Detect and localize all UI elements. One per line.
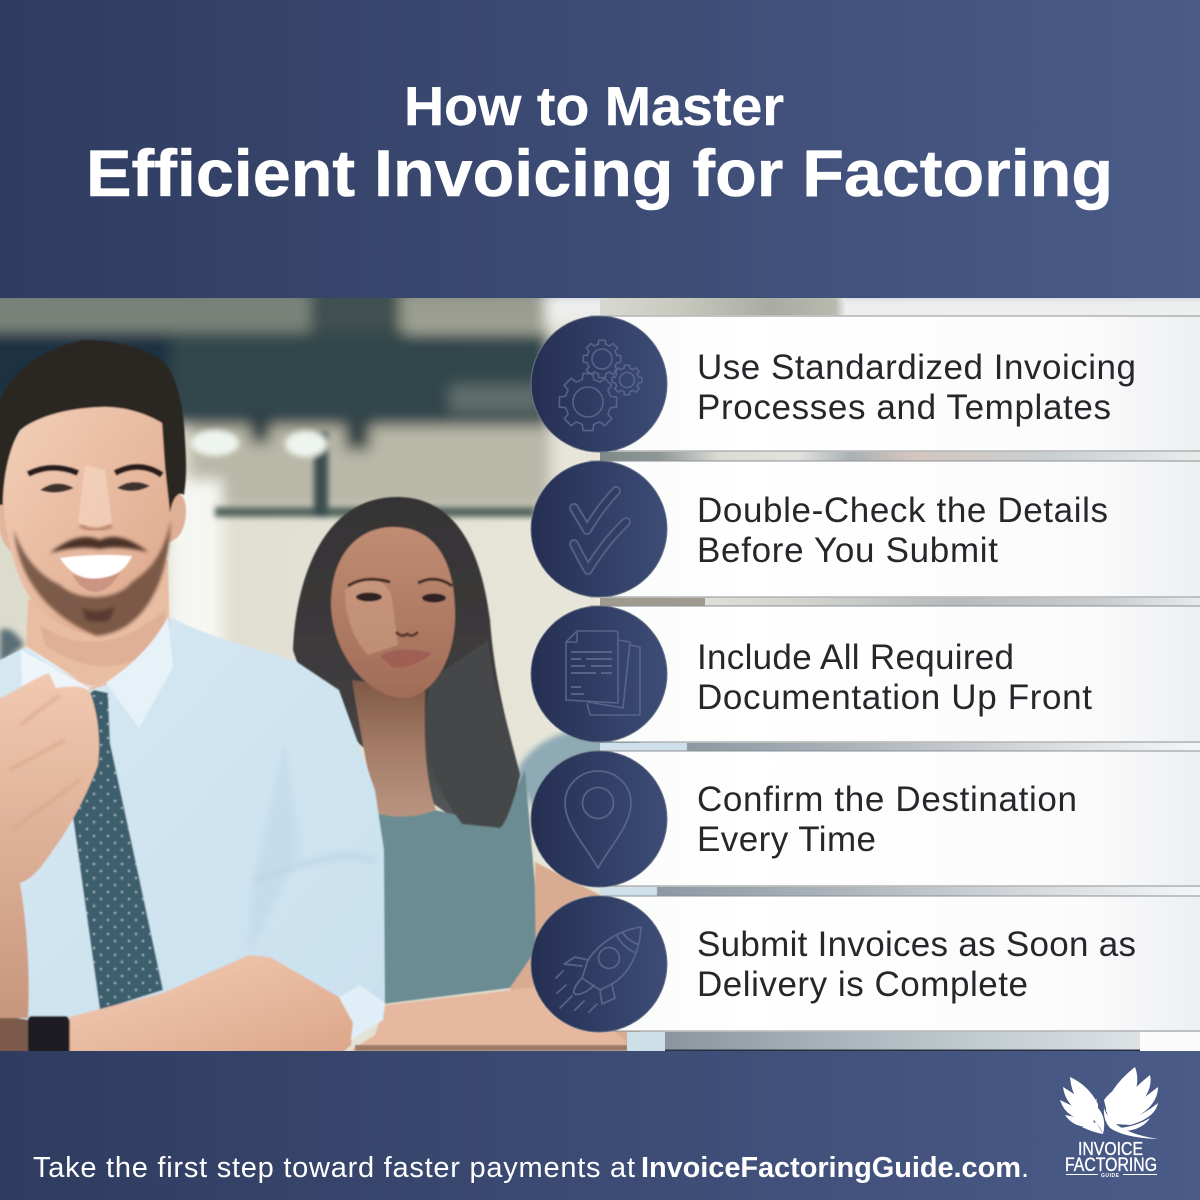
panel 2 text: Before You Submit xyxy=(697,531,998,570)
icon circle: gears xyxy=(531,316,667,452)
icon circle: location pin xyxy=(531,751,667,887)
panel 1 text: Use Standardized Invoicing xyxy=(697,348,1136,387)
photo: two smiling business people in an office xyxy=(0,290,1200,1070)
logo: Invoice Factoring Guide eagle: GUIDE xyxy=(1101,1173,1120,1179)
right arm xyxy=(510,862,640,1051)
panel 3 text: Include All Required xyxy=(697,638,1014,677)
list panel 2 xyxy=(590,461,1200,597)
forearm xyxy=(69,955,353,1055)
brows and eyes xyxy=(28,468,78,474)
icon circle: documents xyxy=(531,606,667,742)
panel 2 text: Double-Check the Details xyxy=(697,491,1108,530)
neck and chest xyxy=(352,680,436,816)
panel 3 text: Documentation Up Front xyxy=(697,678,1092,717)
ears xyxy=(168,493,187,543)
neck xyxy=(26,560,170,690)
header band xyxy=(0,0,1200,298)
footer call to action: InvoiceFactoringGuide.com xyxy=(641,1152,1021,1184)
eagle mark xyxy=(1060,1067,1158,1139)
logo: Invoice Factoring Guide eagle: FACTORING xyxy=(1065,1155,1157,1176)
woman xyxy=(293,497,640,1051)
beard xyxy=(14,520,171,636)
footer call to action: Take the first step toward faster payments at xyxy=(33,1152,635,1184)
footer call to action: . xyxy=(1021,1152,1029,1184)
cuff xyxy=(339,985,385,1040)
brows and eyes xyxy=(348,579,390,586)
hair lock over neck xyxy=(425,640,520,828)
forearm xyxy=(350,987,630,1051)
footer band xyxy=(0,1051,1200,1200)
list panel 5 xyxy=(590,896,1200,1031)
logo wordmark: INVOICE xyxy=(1078,1139,1143,1159)
face xyxy=(331,527,455,698)
hair xyxy=(0,340,186,513)
hand and wrist xyxy=(0,673,99,1018)
panel 4 text: Confirm the Destination xyxy=(697,780,1077,819)
collar xyxy=(24,617,173,728)
nose xyxy=(78,465,112,528)
watch xyxy=(28,1016,69,1054)
panel 4 text: Every Time xyxy=(697,820,876,859)
icon circle: rocket xyxy=(531,896,667,1032)
sleeve crease xyxy=(254,766,296,921)
tie xyxy=(73,690,163,1010)
title line two: Efficient Invoicing for Factoring xyxy=(86,136,1113,210)
office background xyxy=(0,290,1200,1070)
gap strips between panels xyxy=(600,298,1200,1051)
face xyxy=(3,406,171,634)
nose and lips xyxy=(396,632,418,636)
hair xyxy=(293,497,520,828)
panel 5 text: Delivery is Complete xyxy=(697,965,1028,1004)
dress xyxy=(375,770,536,1005)
panel 1 text: Processes and Templates xyxy=(697,388,1111,427)
list panel 3 xyxy=(590,606,1200,742)
panel 5 text: Submit Invoices as Soon as xyxy=(697,925,1136,964)
list panel 4 xyxy=(590,751,1200,886)
background person shoulder, right xyxy=(518,730,644,810)
title line one: How to Master xyxy=(404,75,784,137)
man xyxy=(0,340,385,1055)
logo: Invoice Factoring Guide eagle xyxy=(1060,1067,1158,1179)
shirt torso and sleeve xyxy=(0,617,385,1040)
list panel 1 xyxy=(590,316,1200,451)
mouth xyxy=(60,555,132,579)
icon circle: double check marks xyxy=(531,461,667,597)
